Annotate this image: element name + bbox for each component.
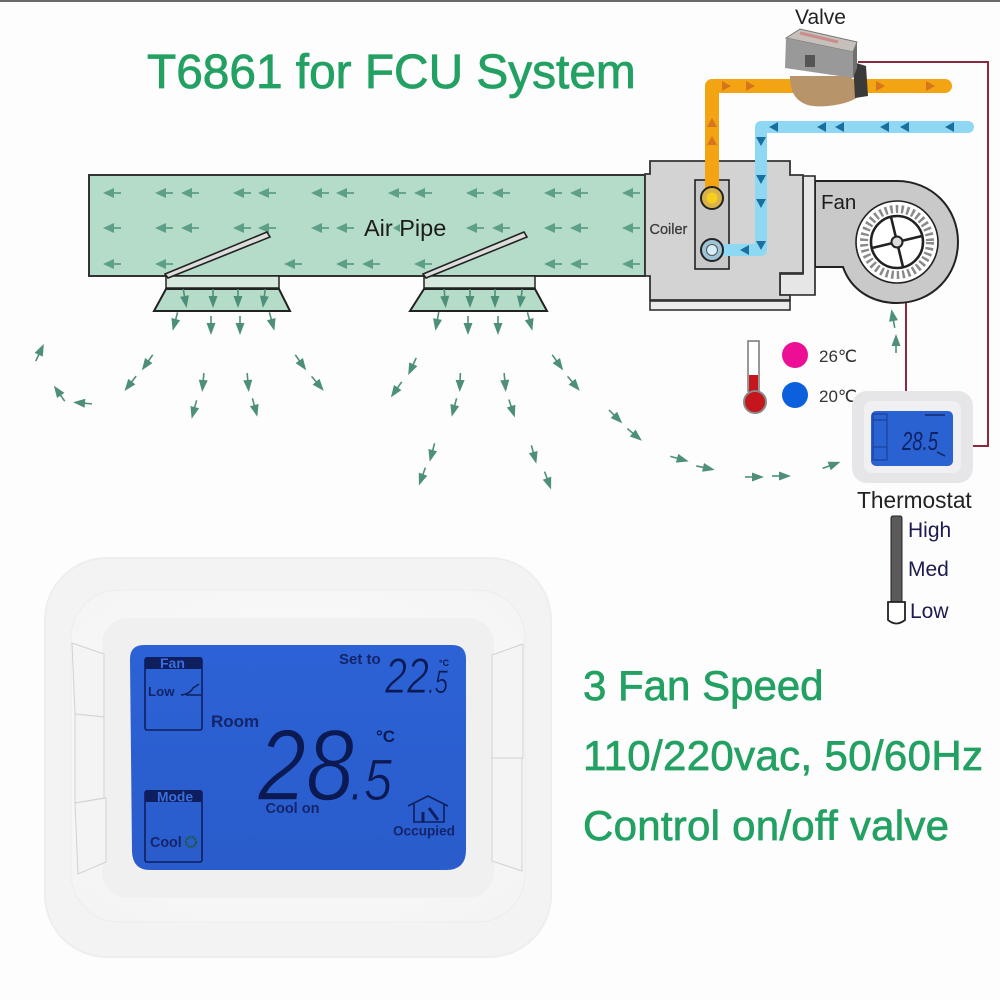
large thermostat photo xyxy=(45,558,551,957)
right buttons xyxy=(492,644,523,871)
label: Fan: Fan xyxy=(821,191,856,214)
thermometer icon xyxy=(744,341,766,413)
label: Occupied: Occupied xyxy=(393,824,455,838)
label: Valve: Valve xyxy=(795,6,846,29)
mode box: Cool xyxy=(150,835,182,851)
valve actuator xyxy=(786,29,857,52)
set temperature reading: °C xyxy=(439,658,450,668)
diffuser right xyxy=(410,232,547,311)
room airflow arrows xyxy=(32,308,900,491)
title: T6861 for FCU System xyxy=(147,46,636,99)
legend: 20 degrees xyxy=(782,382,857,408)
spec: valve control: Control on/off valve xyxy=(583,802,949,849)
mode box: Mode xyxy=(157,790,193,804)
small thermostat: 28.5 xyxy=(901,426,938,456)
fan housing xyxy=(815,181,958,303)
room temperature reading: .5 xyxy=(350,748,393,813)
fan wheel xyxy=(856,201,938,283)
label: High: High xyxy=(908,519,951,542)
legend: 26 degrees xyxy=(782,342,857,368)
airflow arrows in duct xyxy=(103,188,640,269)
set temperature reading: .5 xyxy=(428,664,448,700)
spec text xyxy=(583,662,983,849)
label: Thermostat: Thermostat xyxy=(857,487,972,513)
occupied house icon xyxy=(408,796,448,822)
fan box xyxy=(145,655,202,730)
diffuser left xyxy=(154,232,290,311)
spec: voltage: 110/220vac, 50/60Hz xyxy=(583,732,983,779)
hot water pipe xyxy=(701,81,945,209)
legend: 20 degrees: 20℃ xyxy=(819,387,857,406)
valve brass body xyxy=(790,76,862,106)
fan box: Low xyxy=(148,684,175,699)
mode box xyxy=(145,790,202,862)
coil panel xyxy=(695,180,729,269)
label: Set to: Set to xyxy=(339,651,381,668)
wiring: red control lines xyxy=(858,62,988,446)
left buttons xyxy=(72,643,106,874)
set temperature reading: 22 xyxy=(384,648,429,704)
label: Med: Med xyxy=(908,558,949,581)
LCD screen xyxy=(130,645,466,870)
fan speed slider xyxy=(888,516,951,624)
small arrow between Air and Pipe xyxy=(393,224,400,232)
label: Air Pipe: Air Pipe xyxy=(364,215,446,241)
legend: 26 degrees: 26℃ xyxy=(819,347,857,366)
air pipe duct xyxy=(89,175,645,276)
fan box: Fan xyxy=(160,655,185,671)
room temperature reading: 28 xyxy=(257,710,354,822)
valve xyxy=(785,6,868,106)
room temperature reading: °C xyxy=(376,727,395,746)
coiler unit xyxy=(645,161,815,310)
small thermostat xyxy=(852,391,973,483)
label: Coiler: Coiler xyxy=(650,222,688,238)
bezel xyxy=(45,558,551,957)
spec: 3 Fan Speed: 3 Fan Speed xyxy=(583,662,824,709)
label: Cool on: Cool on xyxy=(266,801,319,817)
label: Low: Low xyxy=(910,600,949,623)
cold water pipe xyxy=(701,122,968,261)
label: Room: Room xyxy=(211,712,259,731)
